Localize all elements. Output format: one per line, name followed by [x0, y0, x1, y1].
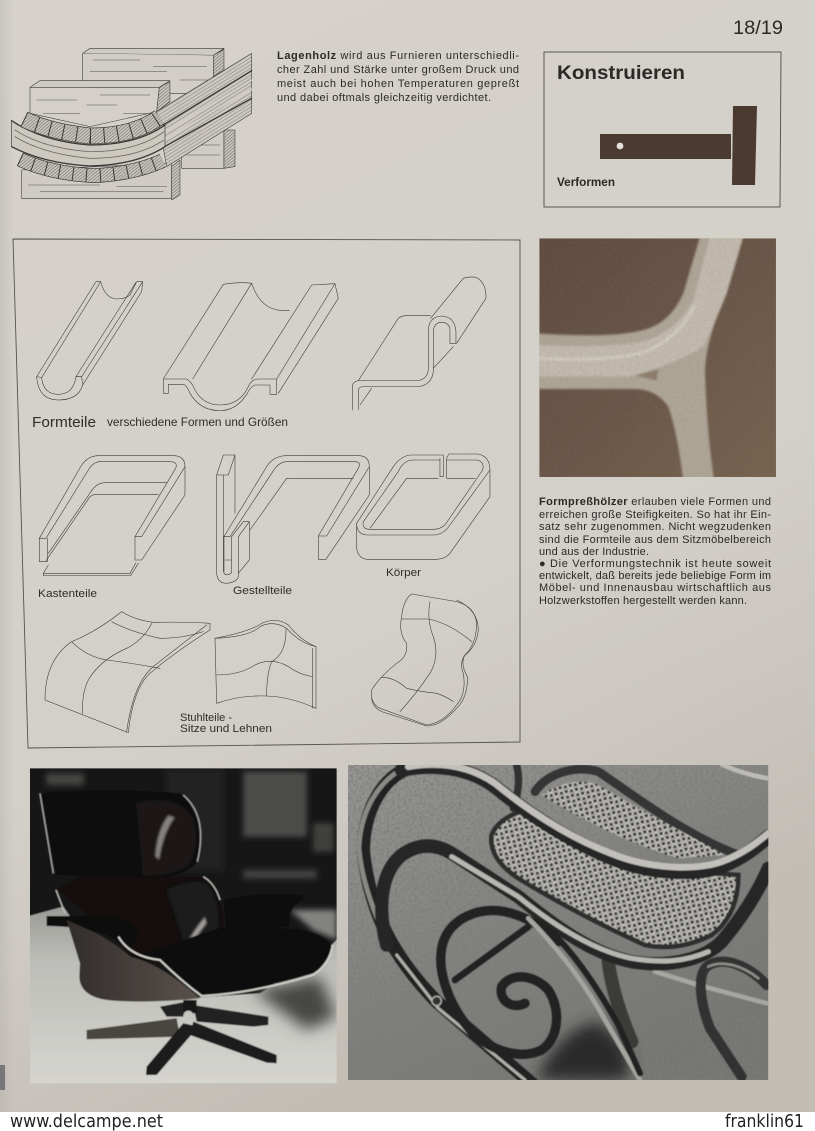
label: Stuhlteile: Stuhlteile -: [180, 712, 232, 724]
scroll: [432, 911, 640, 1080]
legs and stretchers: [455, 927, 767, 1077]
shape: box part: [39, 456, 185, 576]
floor shadow: [253, 977, 337, 1030]
floor: [27, 907, 340, 1087]
floor shadow: [538, 1022, 628, 1080]
caption: verschiedene Formen: verschiedene Formen und Größen: [107, 416, 288, 429]
diagrams row 1: [37, 277, 486, 411]
page number: 18/19: [733, 18, 783, 39]
shape: seat shell: [371, 594, 478, 726]
text: Lagenholz: meist auch bei hohen Temperaturen gepreßt: [277, 78, 519, 90]
back rail: [513, 764, 772, 855]
panel: Formteile diagrams: [13, 239, 520, 748]
shape: trough: [37, 282, 143, 400]
text: Formpreßhölzer: erreichen große Steifigkeiten. So hat ihr Ein-: [539, 509, 771, 521]
label: Verformen: Verformen: [557, 177, 615, 189]
lower press block: [22, 160, 180, 200]
shape: frame part: [217, 455, 369, 583]
shape: hooked profile: [353, 277, 486, 410]
heading: Formteile: Formteile: [32, 415, 96, 431]
text: Lagenholz: cher Zahl und Stärke unter großem Druck und: [277, 64, 519, 76]
text: Formpreßhölzer: ● Die Verformungstechnik ist heute soweit: [539, 558, 771, 570]
photo: lounge chair: [27, 765, 340, 1087]
illustration: laminated wood in press: [12, 48, 252, 200]
shape: body part: [357, 454, 490, 559]
text: Formpreßhölzer: entwickelt, daß bereits jede beliebige Form im: [539, 570, 771, 582]
shape: chair back: [215, 620, 316, 708]
text: Formpreßhölzer: satz sehr zugenommen. Nicht wegzudenken: [539, 521, 771, 533]
text: Formpreßhölzer: Möbel- und Innenausbau wirtschaftlich aus: [539, 582, 772, 594]
text: Lagenholz: [277, 50, 519, 104]
lower wedge blocks: [20, 159, 163, 176]
text: Lagenholz: Lagenholz wird aus Furnieren unterschiedli-: [277, 50, 519, 62]
diagrams row 2 and 3: [39, 454, 490, 733]
text: Formpreßhölzer: [539, 496, 772, 607]
shape: double-flanged profile: [163, 283, 338, 411]
heading: Konstruieren: Konstruieren: [557, 62, 685, 84]
chair seat cushion: [133, 927, 332, 995]
straight laminate section: [157, 53, 252, 167]
text: Formpreßhölzer: und aus der Industrie.: [539, 546, 649, 558]
second rail: [382, 846, 768, 964]
upper wedge blocks: [24, 117, 159, 136]
label: Stuhlteile: [180, 712, 272, 735]
chair base: [87, 1000, 277, 1075]
text: Formpreßhölzer: Formpreßhölzer erlauben viele Formen und: [539, 496, 771, 508]
text: Formpreßhölzer: sind die Formteile aus dem Sitzmöbelbereich: [539, 534, 771, 546]
photo: bentwood rocking chair: [348, 764, 772, 1083]
back press block: [83, 48, 235, 168]
laminate curved layers: [12, 121, 165, 166]
label: Kastenteile: Kastenteile: [38, 588, 97, 600]
label: Körper: Körper: [386, 567, 421, 579]
cane seat: [542, 782, 725, 858]
wood Y-shape: [537, 237, 743, 480]
label: Stuhlteile: Sitze und Lehnen: [180, 723, 272, 735]
icon: bent wood bars: [600, 106, 757, 185]
footer bar: [0, 1111, 815, 1131]
rocker runner: [359, 768, 532, 1083]
chair headrest: [40, 790, 201, 880]
panel: Konstruieren: [544, 52, 781, 207]
photo: pressed wood joint: [537, 237, 776, 480]
text: Lagenholz: und dabei oftmals gleichzeitig verdichtet.: [277, 92, 491, 104]
shape: chair seat: [45, 612, 210, 733]
chair shell edge: [118, 937, 333, 996]
room background: [47, 770, 337, 940]
text: Formpreßhölzer: Holzwerkstoffen hergestellt werden kann.: [539, 595, 747, 607]
chair shell: [67, 920, 200, 1002]
chair back cushion and arms: [47, 877, 303, 967]
top rail: [402, 765, 768, 872]
upper press block: [30, 81, 170, 127]
label: Gestellteile: Gestellteile: [233, 585, 292, 597]
